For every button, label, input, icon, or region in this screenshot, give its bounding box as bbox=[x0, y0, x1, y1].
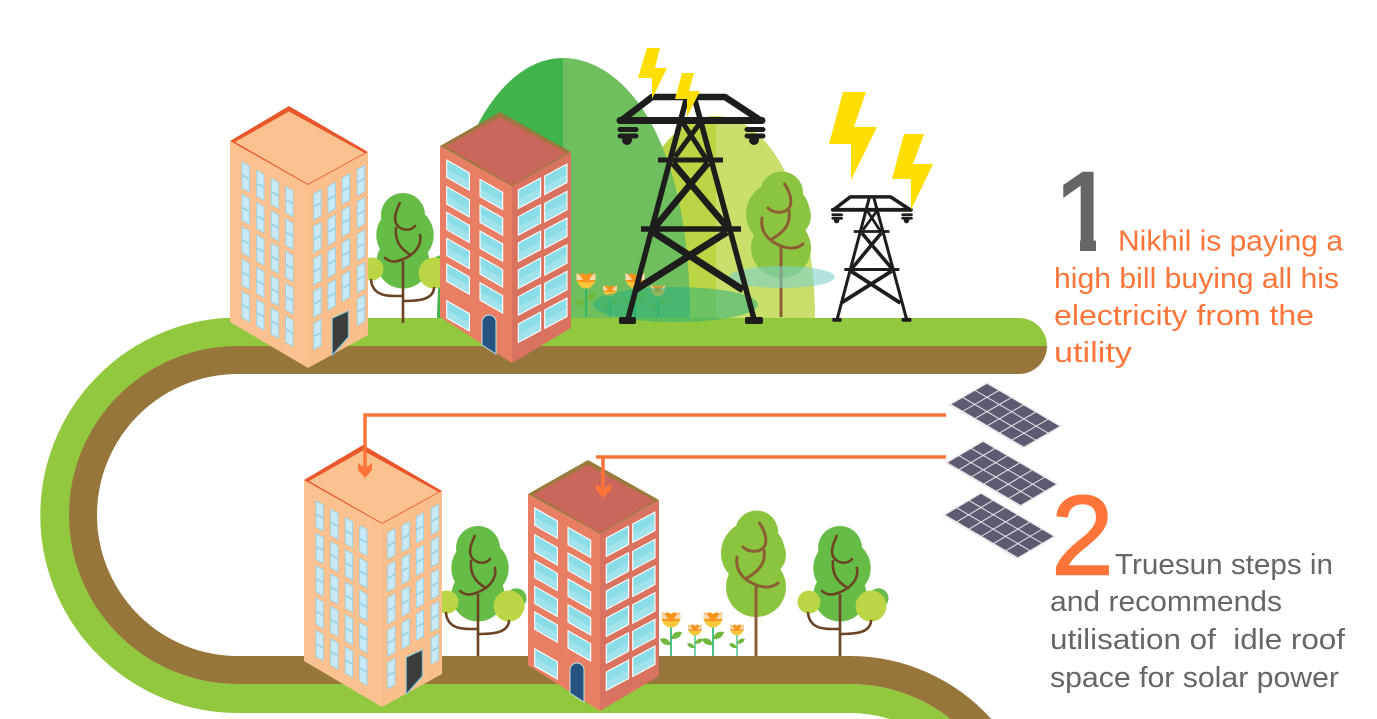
ground shadow ellipse bbox=[593, 287, 758, 322]
tree shadow ellipse bbox=[729, 266, 835, 288]
step 2 text: and recommends bbox=[1050, 586, 1282, 618]
building: red top bbox=[440, 112, 571, 363]
step 2 text: Truesun steps in bbox=[1115, 549, 1333, 581]
tree: lower row light bbox=[721, 510, 786, 656]
dark green hill bbox=[437, 58, 690, 318]
step 2 number: 2 bbox=[1051, 472, 1114, 598]
step 1 text: electricity from the bbox=[1054, 300, 1314, 332]
flowers: top row bbox=[575, 273, 666, 317]
large transmission tower bbox=[619, 97, 763, 324]
solar panels bbox=[942, 382, 1062, 559]
step 1 number: 1 bbox=[1054, 150, 1116, 274]
tree: top row beside buildings bbox=[360, 193, 452, 323]
step 2 text bbox=[1050, 549, 1346, 694]
tree: light green near towers bbox=[746, 172, 811, 317]
small transmission tower bbox=[832, 197, 911, 322]
building: peach top bbox=[230, 106, 368, 368]
flowers: lower row bbox=[660, 612, 745, 656]
arrow: panel to red roof bbox=[596, 457, 946, 498]
tree: lower row right bbox=[798, 526, 888, 656]
building: peach bottom bbox=[304, 445, 442, 707]
step 1 text: high bill buying all his bbox=[1054, 263, 1339, 295]
tree: lower row left bbox=[436, 526, 526, 656]
winding road: grass and soil bands bbox=[55, 318, 1047, 719]
building: red bottom bbox=[528, 460, 659, 711]
lightning bolts bbox=[638, 48, 933, 210]
step 1 text: utility bbox=[1054, 337, 1133, 369]
step 1 text bbox=[1054, 226, 1344, 369]
step 1 text: Nikhil is paying a bbox=[1118, 226, 1344, 258]
step 2 text: space for solar power bbox=[1050, 662, 1339, 694]
light green hill bbox=[615, 116, 815, 318]
arrow: panel to peach roof bbox=[358, 415, 946, 478]
step 2 text: utilisation of idle roof bbox=[1050, 624, 1346, 656]
